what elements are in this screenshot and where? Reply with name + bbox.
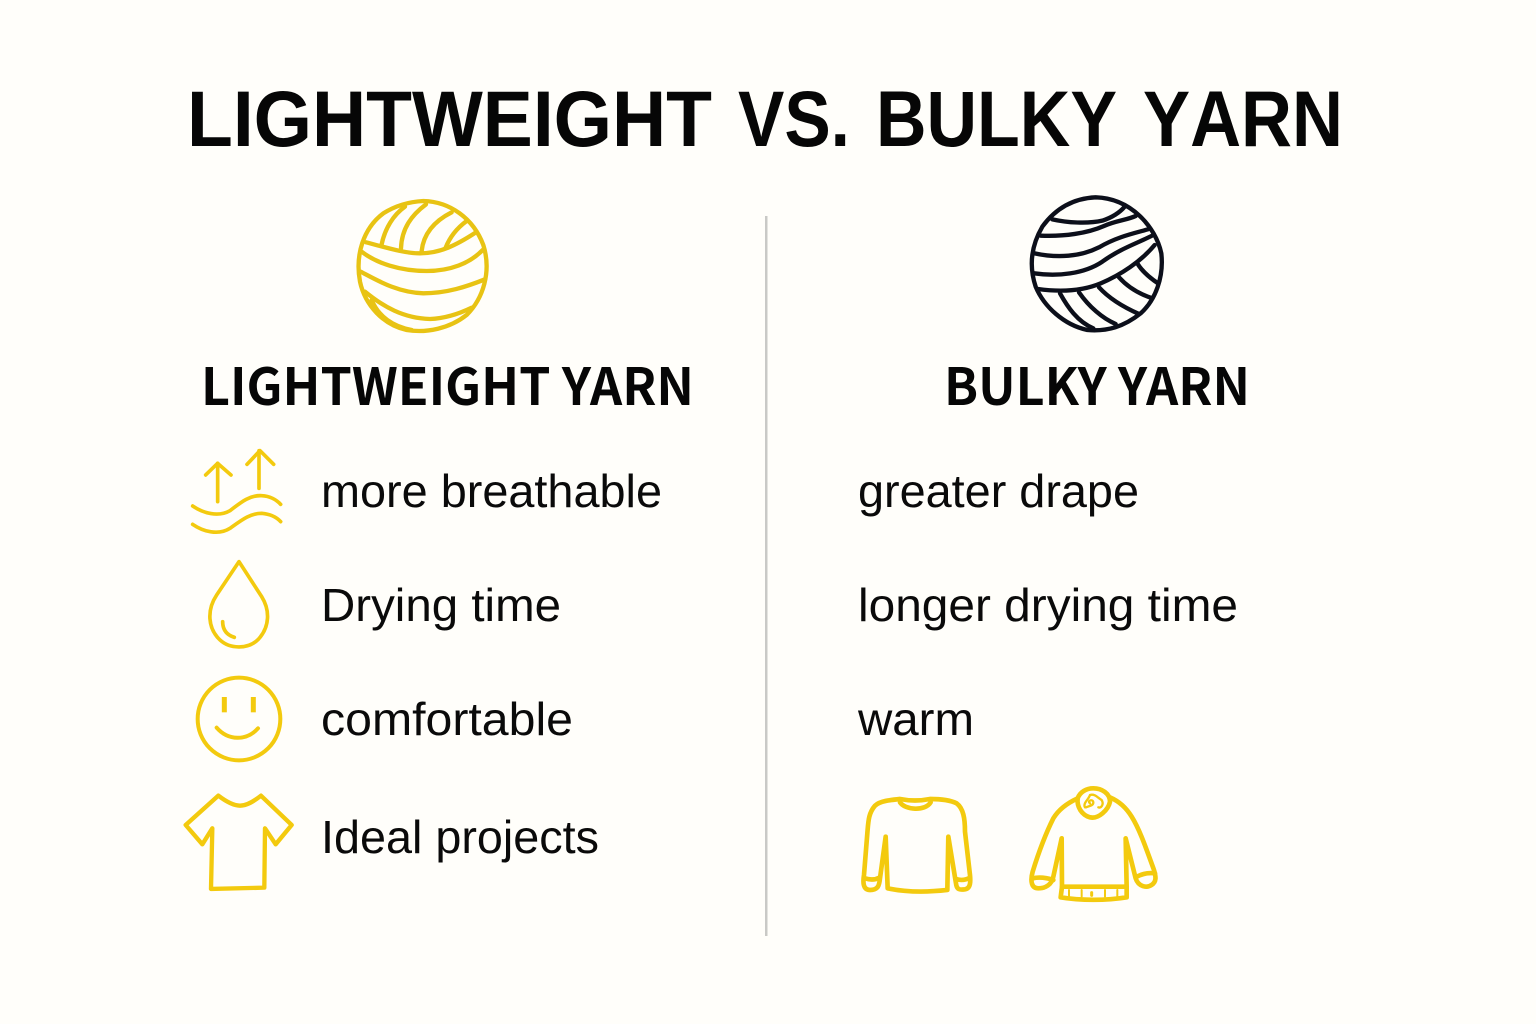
- text: more breathable: more breathable: [321, 465, 662, 517]
- icon: water drop: [210, 562, 268, 647]
- icon: thin sweater: [863, 799, 970, 892]
- panel: lightweight yarn: [186, 201, 694, 889]
- text: drying time: Drying time: [321, 579, 561, 631]
- icon: yellow yarn ball: [359, 201, 487, 331]
- icon: bulky sweater: [1031, 788, 1155, 900]
- text: ideal projects: Ideal projects: [321, 811, 599, 863]
- text: greater drape: greater drape: [858, 465, 1139, 517]
- panel: bulky yarn: [857, 197, 1250, 900]
- icon: black yarn ball: [1032, 197, 1162, 330]
- icon: breathable arrows and waves: [193, 451, 281, 532]
- text: warm: warm: [857, 693, 974, 745]
- title: BULKY: [876, 74, 1117, 163]
- title: LIGHTWEIGHT: [187, 74, 712, 163]
- text: comfortable: comfortable: [321, 693, 573, 745]
- title: YARN: [1143, 74, 1343, 163]
- heading: bulky yarn: BULKY YARN: [944, 346, 1250, 420]
- heading: lightweight yarn: LIGHTWEIGHT YARN: [201, 346, 694, 420]
- divider: [765, 216, 768, 936]
- icon: smiley: [198, 678, 280, 760]
- text: longer drying time: longer drying time: [858, 579, 1238, 631]
- title: VS.: [738, 74, 850, 163]
- icon: t-shirt: [186, 796, 292, 889]
